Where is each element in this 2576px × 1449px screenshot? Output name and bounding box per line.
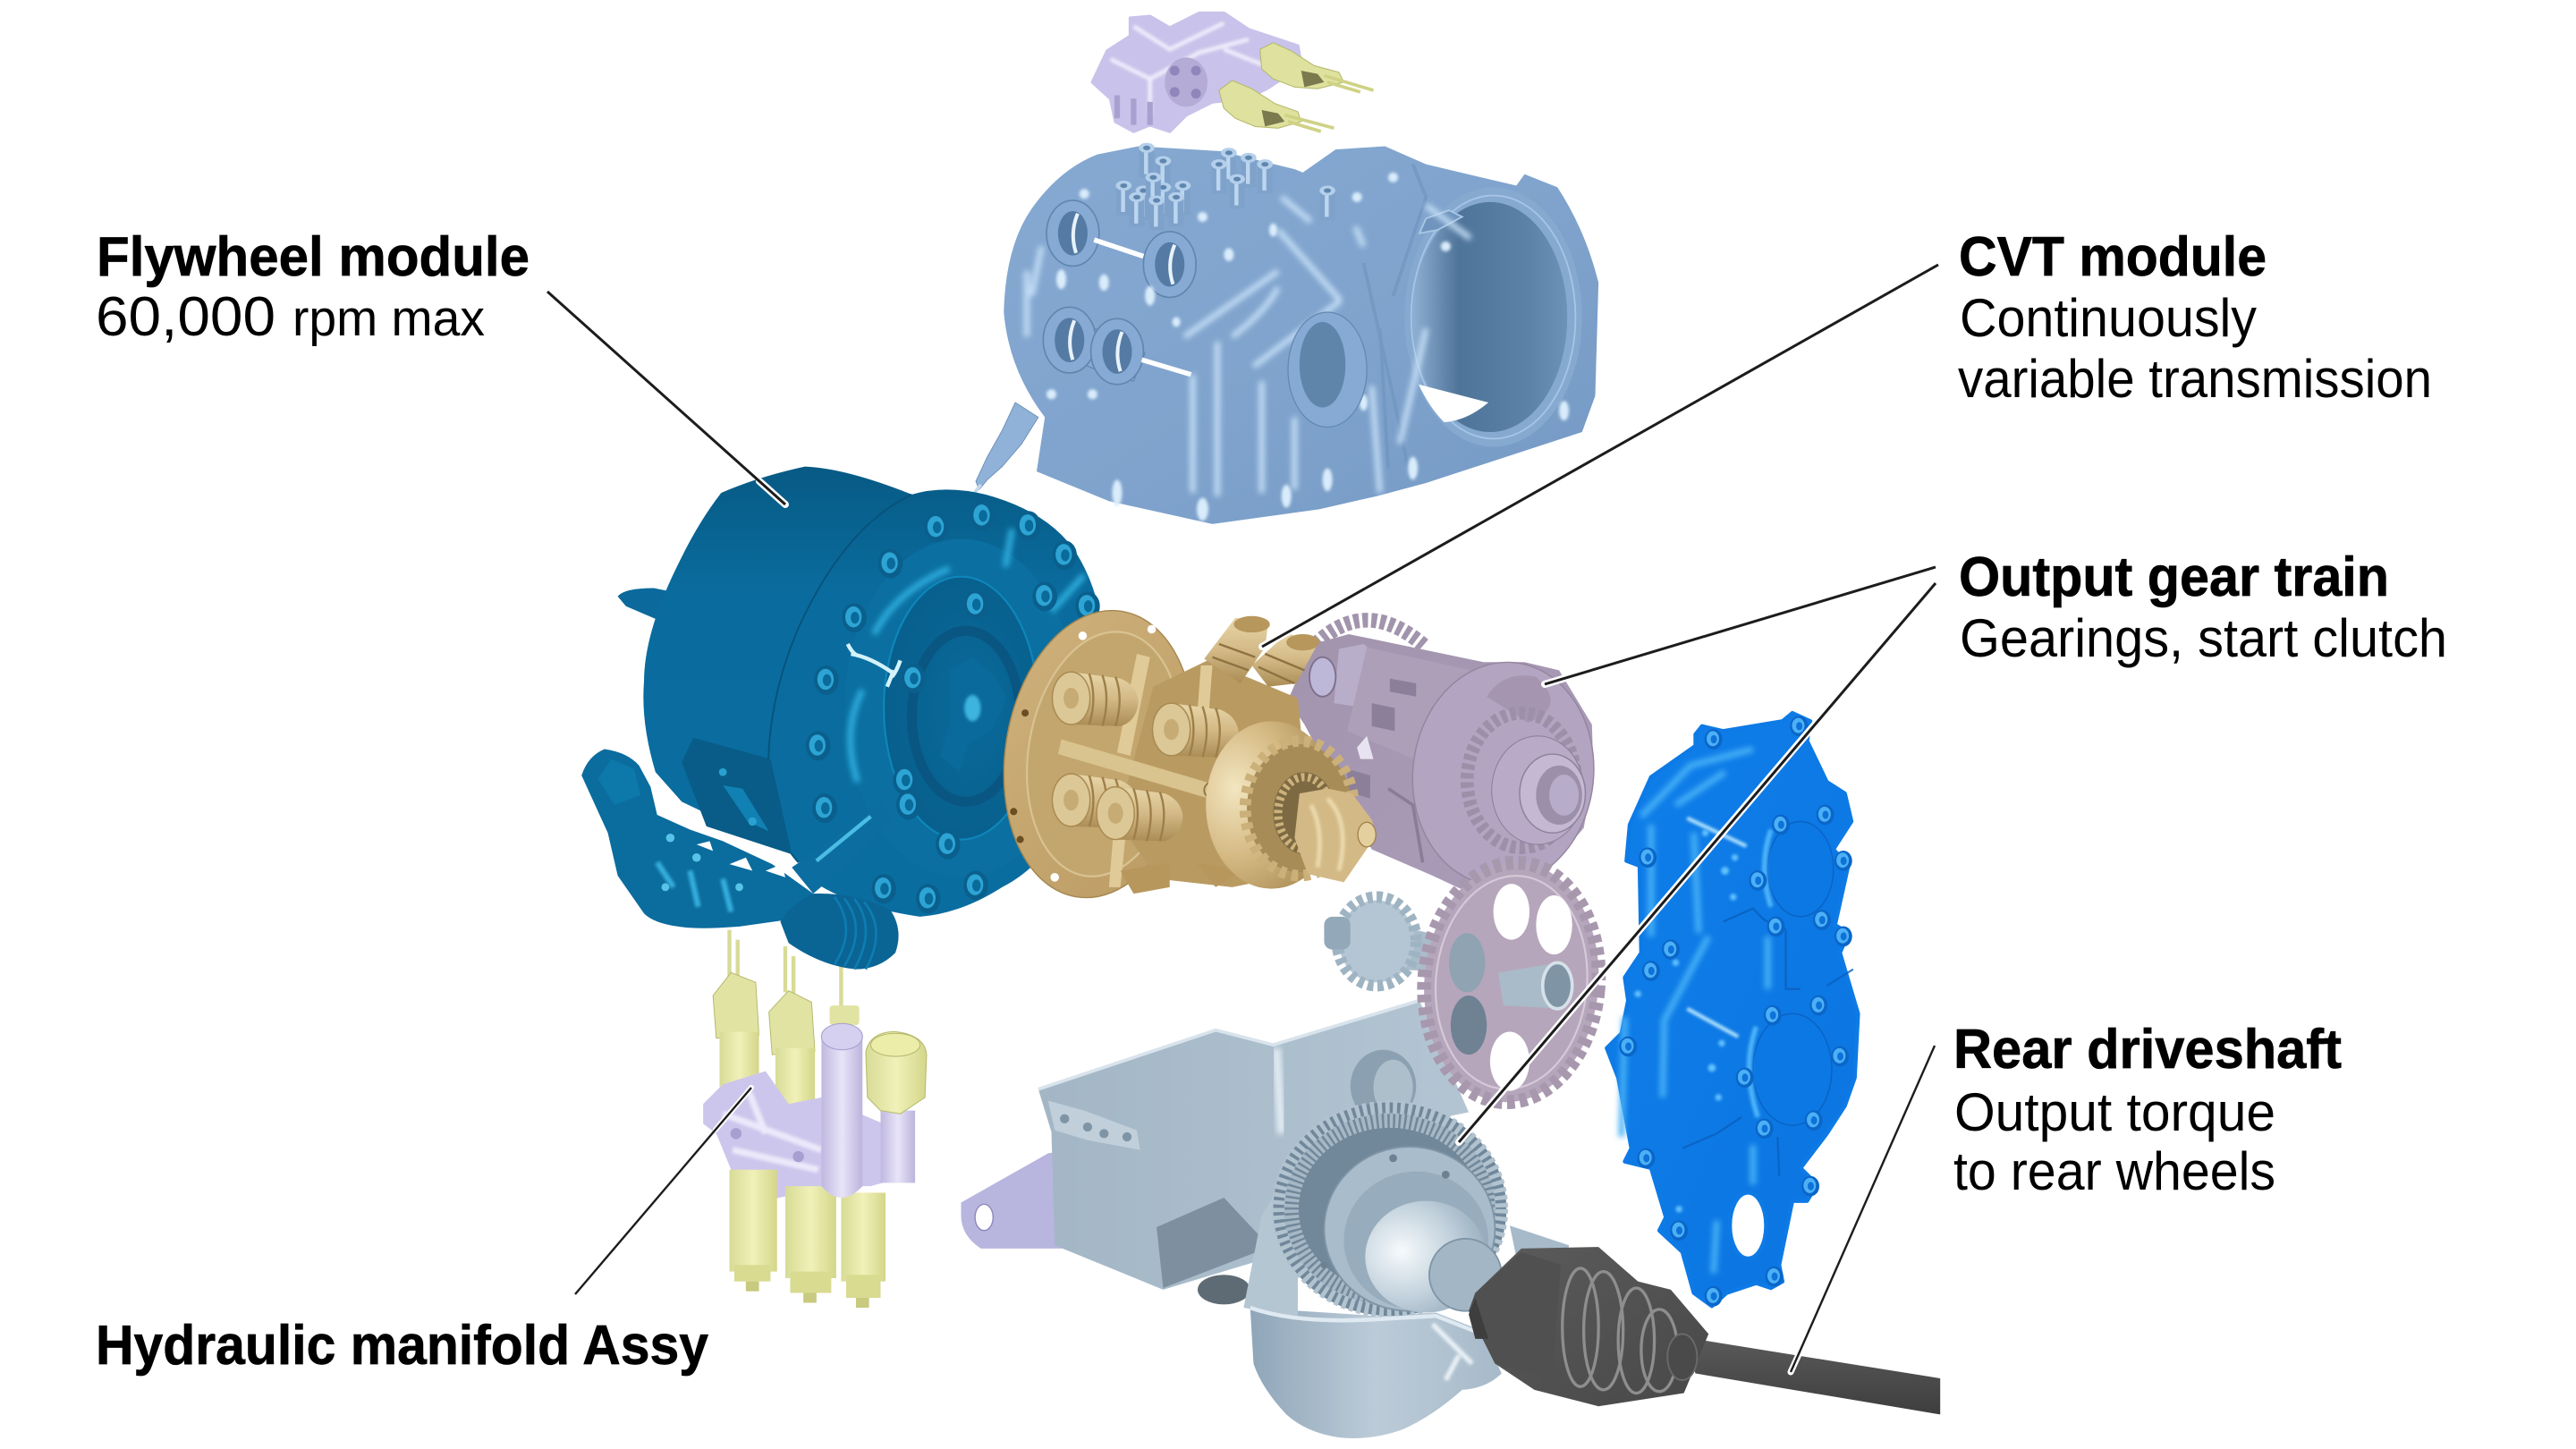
label: output gear train — [1959, 547, 2447, 668]
label: rear driveshaft: Rear driveshaft — [1953, 1019, 2342, 1080]
right flange tab — [1510, 1225, 1569, 1298]
part: CVT module — [984, 597, 1377, 911]
part: speed sensor — [954, 402, 1038, 519]
part: output gear train drum — [1288, 620, 1605, 894]
part: pinion gear and shaft — [1324, 897, 1487, 986]
leader: CVT module — [1262, 265, 1938, 647]
label: rear driveshaft — [1953, 1019, 2342, 1201]
clutch cone — [1121, 721, 1377, 894]
label: flywheel module: 60,000 — [96, 286, 275, 348]
flywheel body — [643, 467, 1104, 917]
mounting lug — [961, 1150, 1068, 1249]
part: CVT housing casting — [1004, 143, 1598, 524]
part: rear driveshaft — [1469, 1247, 1940, 1414]
label: CVT module — [1958, 226, 2432, 409]
label: rear driveshaft: to rear wheels — [1953, 1141, 2275, 1201]
housing box — [1038, 1001, 1469, 1290]
housing round opening — [1351, 1050, 1416, 1122]
leader: hydraulic manifold — [575, 1088, 751, 1294]
all machine parts, drawn at the diagram scale — [581, 13, 1940, 1438]
label: flywheel module: rpm max — [292, 290, 485, 347]
part: ring gear and differential — [1250, 1102, 1506, 1320]
part: flywheel module — [581, 467, 1104, 970]
label: CVT module: Continuously — [1960, 288, 2257, 348]
dome — [1250, 1308, 1502, 1438]
part: rear axle housing — [961, 1001, 1569, 1438]
part: blue side cover — [1606, 713, 1858, 1307]
leader: flywheel module — [547, 292, 785, 504]
twin control pistons — [1204, 616, 1319, 687]
leader lines — [547, 265, 1938, 1372]
housing bore — [1404, 187, 1582, 447]
label: rear driveshaft: Output torque — [1954, 1082, 2275, 1142]
leader: output gear train upper — [1545, 567, 1936, 684]
side port — [1288, 312, 1367, 428]
label: flywheel module: Flywheel module — [97, 226, 530, 288]
label: output gear train: Gearings, start clutch — [1960, 608, 2447, 668]
rear bearing — [1198, 1275, 1250, 1304]
label: CVT module: CVT module — [1959, 226, 2267, 288]
leader: rear driveshaft — [1791, 1046, 1935, 1372]
label: hydraulic manifold: Hydraulic manifold Assy — [96, 1315, 708, 1377]
part: hydraulic manifold assembly — [703, 930, 927, 1308]
label: output gear train: Output gear train — [1959, 547, 2389, 608]
flywheel side connector — [618, 589, 728, 640]
label: CVT module: variable transmission — [1958, 349, 2432, 409]
flywheel lower piping and filter — [581, 750, 899, 970]
part: large idler gear — [1414, 855, 1608, 1109]
flywheel hub — [806, 501, 1100, 913]
part: upper solenoid manifold — [1092, 13, 1374, 131]
label: flywheel module — [96, 226, 530, 348]
leader: output gear train lower — [1459, 583, 1936, 1142]
